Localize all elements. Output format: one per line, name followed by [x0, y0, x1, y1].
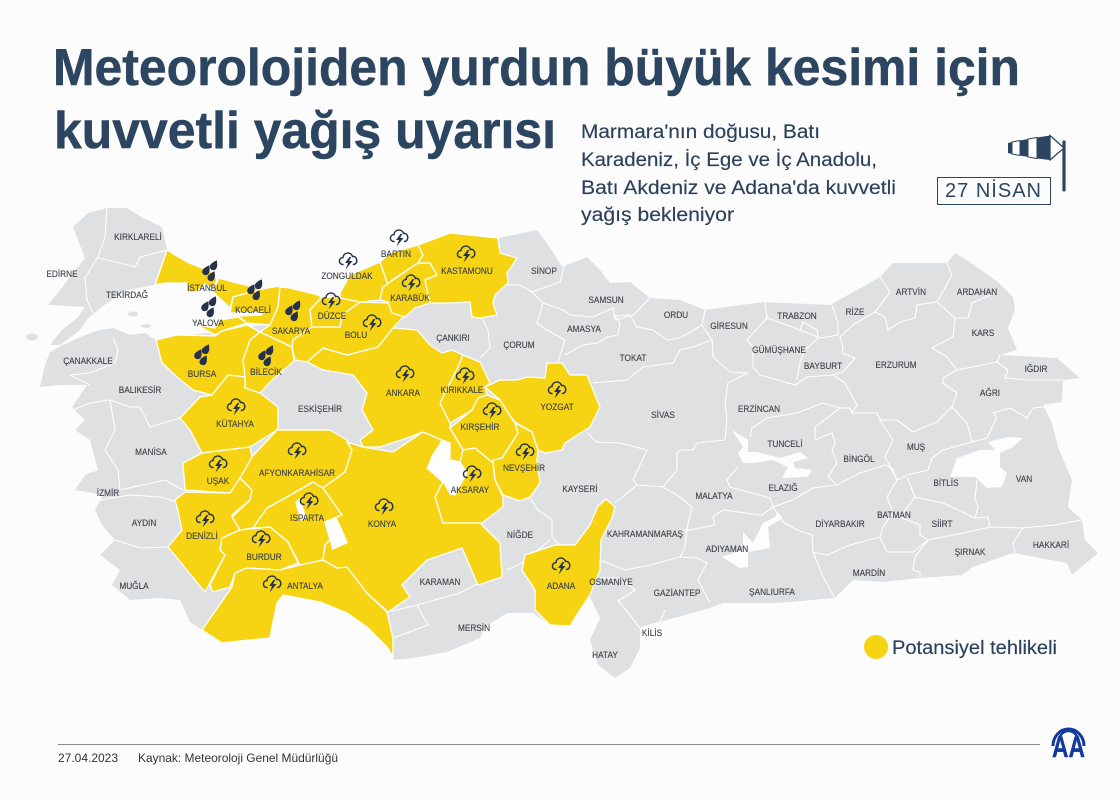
date box — [938, 178, 1050, 204]
province name labels: ANTALYA — [287, 580, 323, 591]
province name labels: KIRIKKALE — [441, 384, 483, 395]
province: Kastamonu — [418, 233, 517, 318]
province name labels: KARABÜK — [390, 292, 430, 303]
province name labels: AFYONKARAHİSAR — [259, 467, 336, 478]
province name labels: KÜTAHYA — [216, 418, 254, 429]
province name labels: KIRKLARELİ — [114, 231, 162, 242]
province name labels: İZMİR — [97, 487, 120, 498]
lake: Van — [950, 437, 1023, 488]
province name labels: BİNGÖL — [843, 453, 875, 464]
province name labels: HATAY — [592, 649, 618, 660]
province: Afyonkarahisar — [232, 430, 352, 530]
province name labels: AKSARAY — [451, 484, 489, 495]
province: Bolu — [292, 302, 403, 362]
province name labels: BURSA — [188, 368, 216, 379]
gray province borders — [70, 208, 1082, 638]
province name labels: KASTAMONU — [441, 265, 493, 276]
province name labels: BARTIN — [381, 248, 411, 259]
province name labels: HAKKARİ — [1033, 539, 1069, 550]
province name labels: ESKİŞEHİR — [298, 403, 343, 414]
icon: windsock — [1008, 136, 1064, 190]
province: Bursa — [156, 325, 260, 395]
province: Kutahya — [180, 375, 278, 453]
province name labels: ORDU — [664, 309, 688, 320]
footer rule and source: Kaynak: Meteoroloji Genel Müdürlüğü — [138, 751, 338, 765]
province: Yozgat — [485, 363, 600, 453]
province name labels: SAMSUN — [588, 294, 624, 305]
province name labels: BALIKESİR — [119, 384, 162, 395]
province: Kirsehir — [450, 395, 518, 463]
yellow warning provinces — [155, 233, 615, 657]
province: Nevsehir — [493, 423, 540, 501]
province name labels: MERSİN — [458, 622, 490, 633]
province name labels: TRABZON — [777, 310, 817, 321]
province name labels: EDİRNE — [46, 268, 78, 279]
province name labels: MUŞ — [907, 441, 925, 452]
province name labels: ÇORUM — [503, 339, 535, 350]
icons: thunderstorm clouds — [196, 230, 570, 593]
province name labels: ÇANKIRI — [436, 332, 470, 343]
province name labels: ADANA — [547, 580, 575, 591]
province: Usak — [183, 447, 252, 493]
province name labels: ERZİNCAN — [738, 403, 780, 414]
province name labels: SİİRT — [932, 518, 953, 529]
lake: Egirdir — [295, 498, 307, 521]
province name labels: TEKİRDAĞ — [106, 289, 148, 300]
province name labels: YALOVA — [192, 317, 224, 328]
province name labels: ŞIRNAK — [955, 546, 985, 557]
province name labels: ISPARTA — [290, 512, 324, 523]
province name labels: ANKARA — [386, 387, 420, 398]
province name labels: ELAZIĞ — [768, 482, 798, 493]
province name labels: DİYARBAKIR — [815, 518, 865, 529]
title: Meteorolojiden yurdun büyük kesimi için — [53, 39, 1020, 97]
province name labels: OSMANİYE — [589, 576, 633, 587]
province name labels: ARTVİN — [896, 286, 926, 297]
province name labels: NEVŞEHİR — [503, 462, 546, 473]
title: kuvvetli yağış uyarısı — [54, 102, 556, 160]
province name labels: TUNCELİ — [767, 438, 803, 449]
province name labels: AYDIN — [132, 517, 156, 528]
province name labels: MALATYA — [695, 490, 733, 501]
province name labels: KONYA — [368, 518, 396, 529]
province: Bartin — [380, 245, 423, 285]
province: Kocaeli — [230, 286, 280, 325]
province name labels: ZONGULDAK — [321, 270, 373, 281]
province name labels: IĞDIR — [1025, 363, 1048, 374]
province name labels: ADIYAMAN — [706, 543, 748, 554]
province name labels: MANİSA — [135, 446, 167, 457]
province name labels: BATMAN — [877, 509, 911, 520]
subtitle text block: Batı Akdeniz ve Adana'da kuvvetli — [581, 178, 896, 199]
subtitle text block: yağış bekleniyor — [581, 205, 735, 226]
province: Aksaray — [435, 448, 503, 523]
lake: Tuz — [427, 440, 467, 495]
province: Ankara — [307, 328, 463, 462]
province name labels: KİLİS — [642, 627, 662, 638]
province name labels: KARAMAN — [420, 576, 460, 587]
lakes — [295, 430, 1023, 568]
province name labels: KIRŞEHİR — [461, 421, 500, 432]
province name labels: MUĞLA — [119, 580, 149, 591]
province name labels: TOKAT — [620, 352, 647, 363]
province name labels: ŞANLIURFA — [749, 586, 795, 597]
province: Duzce — [310, 297, 360, 327]
province name labels: BAYBURT — [804, 360, 843, 371]
province: Konya — [323, 432, 502, 612]
province name labels: BİTLİS — [933, 477, 959, 488]
province name labels: RİZE — [846, 306, 864, 317]
province name labels: ARDAHAN — [957, 286, 997, 297]
province name labels: GÜMÜŞHANE — [752, 344, 806, 355]
lake: Ataturk dam — [722, 512, 783, 568]
province name labels: AMASYA — [567, 323, 601, 334]
province: Adana — [522, 499, 615, 626]
subtitle text block: Marmara'nın doğusu, Batı — [581, 122, 820, 143]
province name labels: DÜZCE — [318, 310, 346, 321]
province name labels: GAZİANTEP — [654, 587, 700, 598]
province name labels: SİNOP — [531, 265, 557, 276]
province name labels: DENİZLİ — [186, 530, 218, 541]
province name labels: YOZGAT — [540, 401, 574, 412]
province name labels: UŞAK — [207, 475, 229, 486]
province name labels: NİĞDE — [507, 529, 533, 540]
province: Karabuk — [380, 263, 437, 317]
province name labels: İSTANBUL — [187, 282, 227, 293]
Anatolia base region — [40, 230, 1098, 678]
lake: Beysehir — [325, 518, 348, 550]
province name labels: GİRESUN — [710, 320, 748, 331]
province name labels: KARS — [972, 327, 994, 338]
province: Burdur — [210, 527, 298, 592]
map of Turkey — [26, 208, 1098, 678]
footer rule and source: 27.04.2023 — [58, 751, 118, 765]
province: Isparta — [253, 482, 342, 565]
province name labels: SAKARYA — [272, 325, 310, 336]
subtitle text block — [581, 122, 896, 226]
province name labels — [46, 231, 1069, 660]
province name labels: MARDİN — [853, 567, 885, 578]
lake: Keban — [732, 430, 812, 478]
province: Istanbul Europe — [155, 250, 217, 292]
footer rule and source — [58, 744, 1040, 765]
Thrace base region — [48, 208, 167, 345]
province name labels: BOLU — [345, 329, 367, 340]
province: Zonguldak — [340, 262, 388, 302]
province: Denizli — [168, 478, 252, 592]
icons: heavy rain drops — [194, 260, 300, 366]
province: Istanbul Asia — [213, 278, 262, 308]
province: Kirikkale — [440, 355, 490, 423]
province name labels: KAYSERİ — [562, 483, 598, 494]
province name labels: KAHRAMANMARAŞ — [607, 528, 683, 539]
province name labels: AĞRI — [980, 387, 1000, 398]
province: Sakarya — [260, 287, 322, 347]
province name labels: VAN — [1016, 473, 1032, 484]
title — [53, 39, 1020, 160]
province: Antalya — [202, 560, 393, 657]
subtitle text block: Karadeniz, İç Ege ve İç Anadolu, — [581, 150, 877, 171]
province: Bilecik — [243, 332, 294, 393]
province name labels: ÇANAKKALE — [63, 355, 113, 366]
small islands — [26, 312, 151, 340]
province name labels: BURDUR — [246, 551, 282, 562]
province name labels: ERZURUM — [875, 359, 917, 370]
province name labels: BİLECİK — [250, 366, 282, 377]
date box: 27 NİSAN — [945, 179, 1041, 202]
legend: Potansiyel tehlikeli — [892, 638, 1057, 659]
province name labels: KOCAELİ — [235, 304, 271, 315]
province name labels: SİVAS — [651, 409, 675, 420]
province: Yalova — [197, 317, 247, 335]
AA logo: AA — [1052, 731, 1085, 764]
